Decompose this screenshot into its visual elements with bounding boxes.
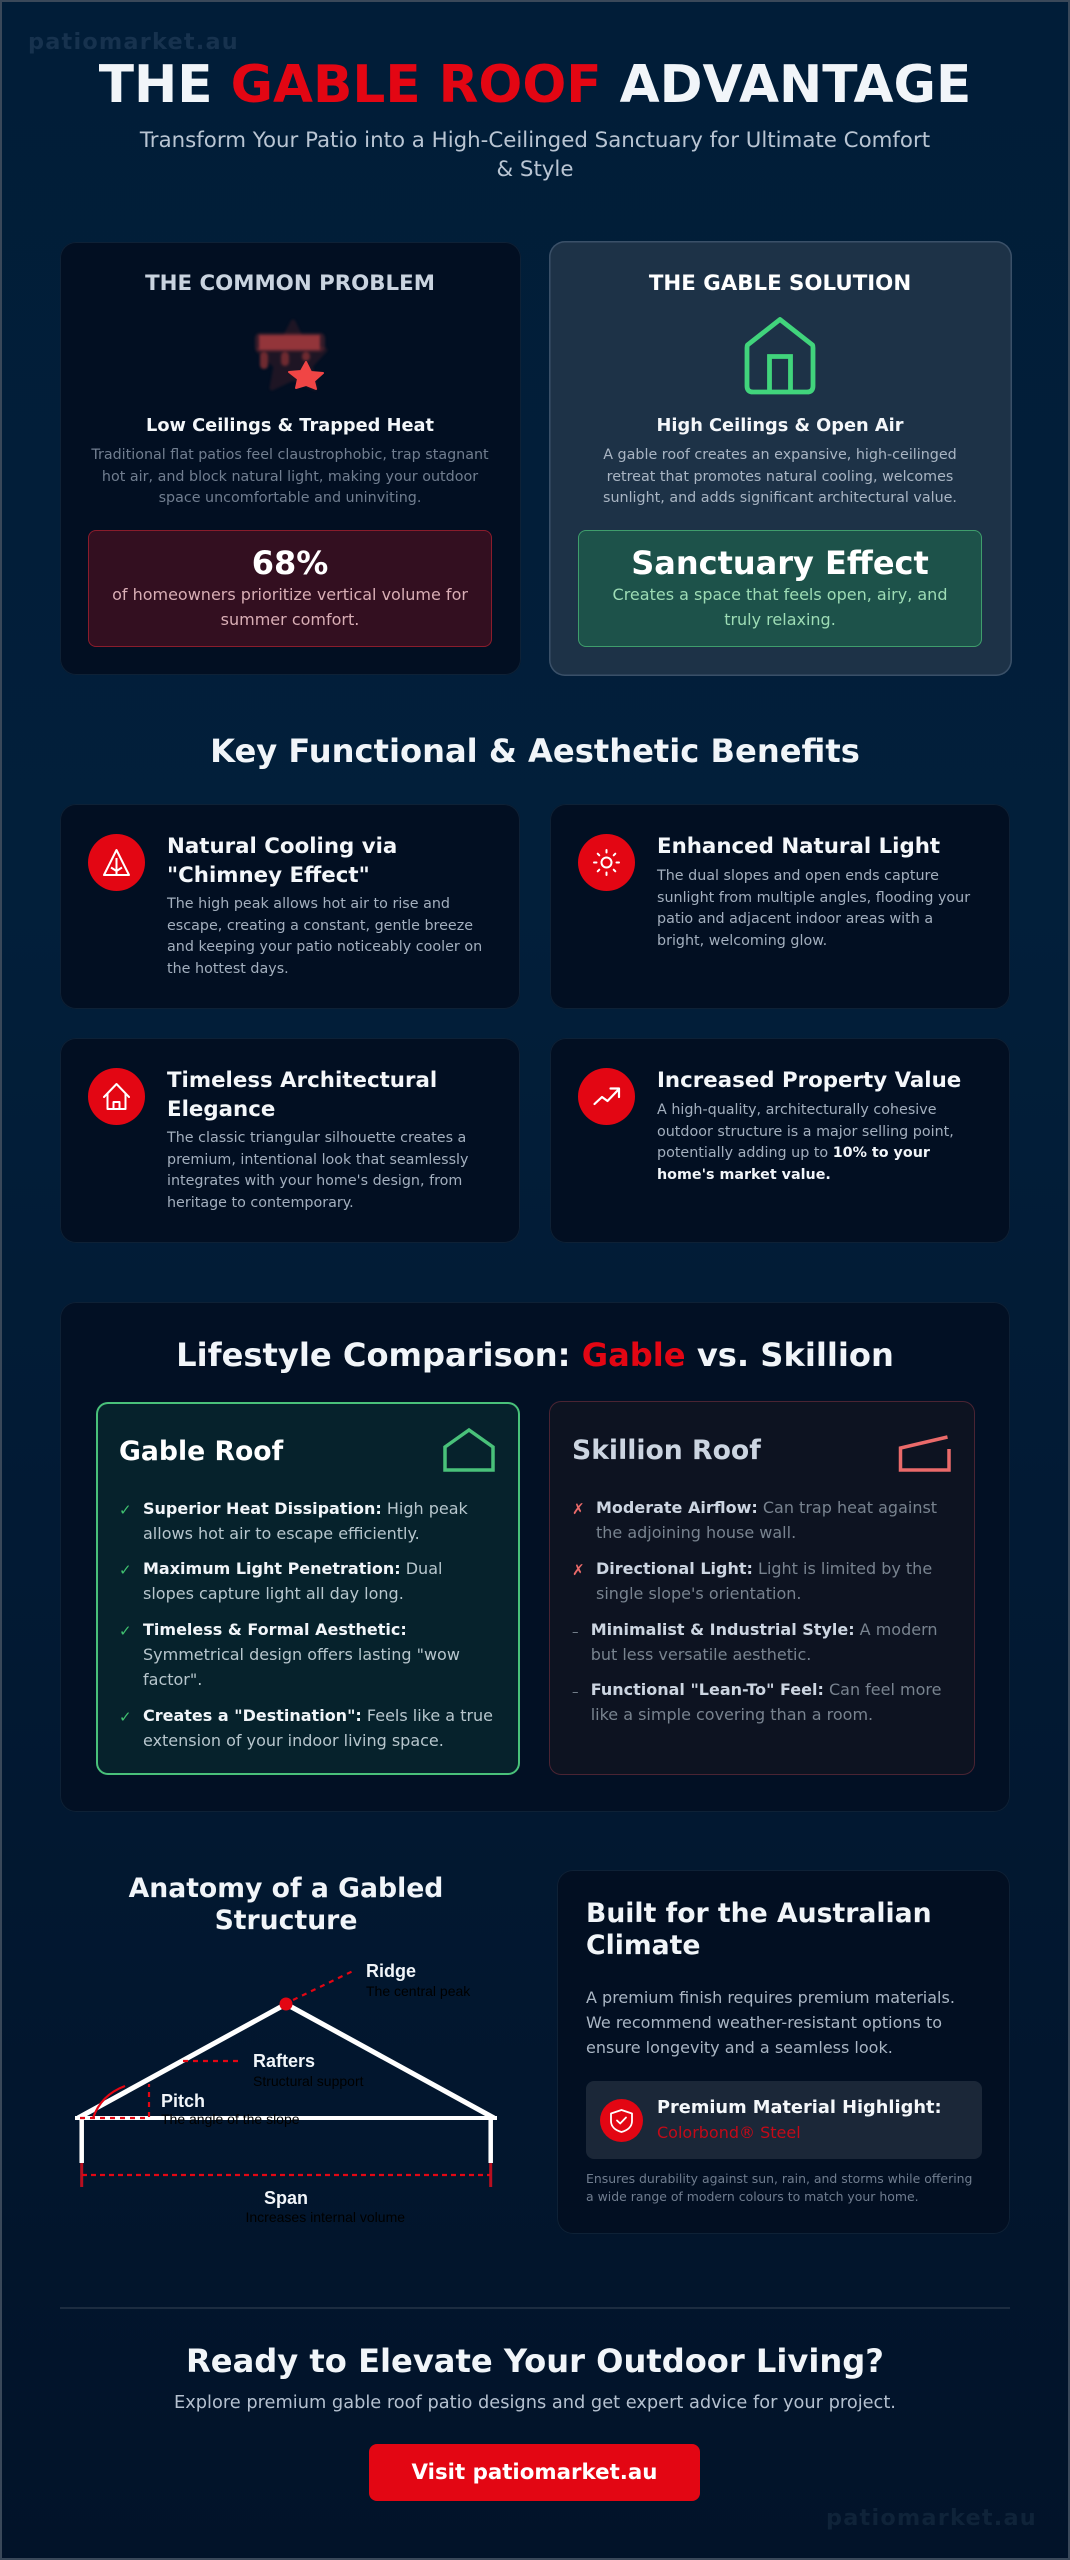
list item: ✓ [119,1561,132,1579]
callout caption: truly relaxing. [724,610,836,629]
callout caption: Creates a space that feels open, airy, and [613,584,947,604]
list item: like a simple covering than a room. [591,1705,873,1724]
stat caption [112,584,468,629]
benefit description: escape, creating a constant, gentle breeze [167,918,473,934]
benefit title: Timeless Architectural [167,1068,437,1093]
stat caption: of homeowners prioritize vertical volume for [112,584,468,604]
benefit title: Natural Cooling via [167,834,397,859]
benefit description: heritage to contemporary. [167,1195,354,1211]
benefit description: bright, welcoming glow. [657,932,827,948]
list item [119,1706,493,1750]
text: problem description: space uncomfortable and uninviting. [159,490,421,506]
text: problem description: hot air, and block natural light, making your outdoor [102,469,478,485]
annotation: span: Span [264,2188,308,2208]
icon: trapped heat star [254,320,328,391]
list item: Moderate Airflow: Can trap heat against [596,1498,937,1517]
callout title: Premium Material Highlight: [657,2097,942,2118]
benefit description: the hottest days. [167,961,289,977]
benefit title [167,1068,437,1122]
watermark: top left: patiomarket.au [28,29,239,55]
text: footnote [586,2171,972,2204]
text: footnote: Ensures durability against sun, rain, and storms while offering [586,2171,972,2186]
callout: sanctuary effect [578,530,982,647]
list item: ✓ [119,1501,132,1519]
benefit title: Enhanced Natural Light [657,834,940,859]
icon: chimney effect triangle [88,834,145,891]
icon: house [88,1068,145,1125]
icon: green house [744,317,816,394]
text: description [586,1988,955,2057]
list item: Creates a "Destination": Feels like a true [143,1706,493,1725]
stat caption: summer comfort. [221,610,359,629]
text: description: ensure longevity and a seamless look. [586,2038,893,2057]
annotation: pitch: The angle of the slope [161,2111,300,2127]
section heading: benefits: Key Functional & Aesthetic Benefits [210,732,860,770]
list item: single slope's orientation. [596,1584,801,1603]
benefit description: The dual slopes and open ends capture [657,868,939,884]
annotation: ridge: Ridge [366,1961,416,1981]
list item [572,1620,938,1664]
list item: Minimalist & Industrial Style: A modern [591,1620,938,1638]
list item [572,1559,932,1603]
panel: skillion roof [549,1401,975,1775]
icon: gable outline [443,1428,495,1472]
icon: sun [578,834,635,891]
benefit description [166,1130,468,1211]
annotation: pitch [80,2084,300,2127]
list item: ✗ [572,1561,585,1579]
text: solution description: sunlight, and adds significant architectural value. [603,490,957,506]
text: footnote: a wide range of modern colours to match your home. [586,2189,919,2204]
heading: the common problem: THE COMMON PROBLEM [145,271,435,296]
benefit title [167,834,397,888]
divider [60,2307,1010,2308]
benefit description [166,896,482,977]
card title: Skillion Roof [572,1435,761,1466]
annotation: ridge: The central peak [366,1983,471,1999]
annotation: rafters: Structural support [253,2073,364,2089]
heading [586,1898,932,1961]
benefit description [657,1102,954,1182]
annotation: rafters [183,2051,364,2089]
list item [119,1620,460,1689]
diagram: gable anatomy [75,1961,497,2225]
benefit description: outdoor structure is a major selling point, [657,1124,954,1140]
list item: slopes capture light all day long. [143,1584,404,1603]
subheading: low ceilings: Low Ceilings & Trapped Heat [146,415,434,436]
panel: gable roof [96,1402,520,1775]
list item: Directional Light: Light is limited by the [596,1559,932,1578]
heading: Climate [586,1930,700,1961]
text: solution description [603,447,957,506]
annotation: span [82,2163,491,2225]
list item: Functional "Lean-To" Feel: Can feel more [591,1680,941,1699]
heading: Built for the Australian [586,1898,932,1929]
benefit description: The classic triangular silhouette creates a [167,1130,466,1146]
annotation: span: Increases internal volume [246,2209,405,2225]
list item: extension of your indoor living space. [143,1731,444,1750]
panel: built for the australian climate [557,1870,1010,2234]
list item: Superior Heat Dissipation: High peak [143,1499,468,1518]
heading: anatomy: Structure [215,1905,357,1936]
watermark: bottom right: patiomarket.au [826,2505,1037,2531]
text: solution description: A gable roof creates an expansive, high-ceilinged [603,447,957,463]
panel: the gable solution [548,241,1012,676]
benefit description: patio and adjacent indoor areas with a [657,911,933,927]
subheading: high ceilings: High Ceilings & Open Air [657,415,903,436]
title: THE GABLE ROOF ADVANTAGE [99,55,971,115]
list item: – [572,1624,578,1640]
list item: ✓ [119,1708,132,1726]
annotation: ridge [280,1961,471,2010]
annotation: pitch: Pitch [161,2091,205,2111]
subtitle: & Style [496,157,573,182]
heading: the gable solution: THE GABLE SOLUTION [649,271,911,296]
section heading: comparison: Lifestyle Comparison: Gable vs. Skillion [176,1336,894,1374]
heading: anatomy: Anatomy of a Gabled [129,1873,443,1904]
benefit title: "Chimney Effect" [167,863,370,888]
list item [119,1559,442,1603]
benefit description: integrates with your home's design, from [167,1173,462,1189]
benefit title: Elegance [167,1097,275,1122]
callout title: Sanctuary Effect [631,544,929,582]
panel: natural cooling [60,804,520,1009]
benefit description: sunlight from multiple angles, flooding your [657,890,970,906]
list item [119,1499,468,1543]
icon: shield check [600,2099,643,2142]
text: description: A premium finish requires premium materials. [586,1988,955,2007]
structure: roof and walls [75,2004,497,2163]
benefit description: home's market value. [657,1166,831,1182]
list item: – [572,1685,578,1700]
callout value: Colorbond® Steel [657,2122,801,2142]
panel: the common problem [60,242,520,675]
list item: factor". [143,1670,202,1689]
benefit description: potentially adding up to 10% to your [657,1145,930,1161]
list item: Timeless & Formal Aesthetic: [143,1620,407,1639]
subtitle [140,128,930,182]
text: solution description: retreat that promotes natural cooling, welcomes [607,469,953,485]
list item [572,1498,937,1542]
list item: Symmetrical design offers lasting "wow [143,1645,460,1664]
panel: property value [550,1038,1010,1243]
subtitle: Transform Your Patio into a High-Ceilinged Sanctuary for Ultimate Comfort [140,128,930,153]
text: problem description: Traditional flat patios feel claustrophobic, trap stagnant [91,447,489,463]
benefit description: premium, intentional look that seamlessly [167,1152,468,1168]
heading: anatomy [128,1873,443,1936]
heading: call to action: Ready to Elevate Your Outdoor Living? [186,2342,884,2380]
list item: Maximum Light Penetration: Dual [143,1559,442,1578]
text: problem description [91,447,489,506]
card title: Gable Roof [119,1436,283,1467]
list item [572,1680,941,1724]
benefit description: and keeping your patio noticeably cooler on [167,939,482,955]
callout: 68% statistic [88,530,492,647]
button: visit patiomarket.au [369,2444,700,2501]
icon: skillion outline [898,1435,951,1472]
stat number: 68% [252,544,328,582]
panel: natural light [550,804,1010,1009]
benefit description: A high-quality, architecturally cohesive [657,1102,937,1118]
list item: but less versatile aesthetic. [591,1644,811,1664]
list item: ✗ [572,1500,585,1518]
button: visit patiomarket.au: Visit patiomarket.au [412,2460,657,2485]
benefit description [656,868,970,948]
list item: allows hot air to escape efficiently. [143,1524,420,1543]
text: description: We recommend weather-resistant options to [586,2013,942,2032]
benefit description: The high peak allows hot air to rise and [167,896,450,912]
list item: the adjoining house wall. [596,1523,796,1542]
callout: premium material [586,2081,982,2159]
text: call to action: Explore premium gable roof patio designs and get expert advice for your project. [174,2392,896,2413]
benefit title: Increased Property Value [657,1068,961,1093]
annotation: rafters: Rafters [253,2051,315,2071]
icon: trending arrow [578,1068,635,1125]
panel: lifestyle comparison [60,1302,1010,1812]
callout caption [613,584,947,629]
list item: ✓ [119,1622,132,1640]
panel: architectural elegance [60,1038,520,1243]
